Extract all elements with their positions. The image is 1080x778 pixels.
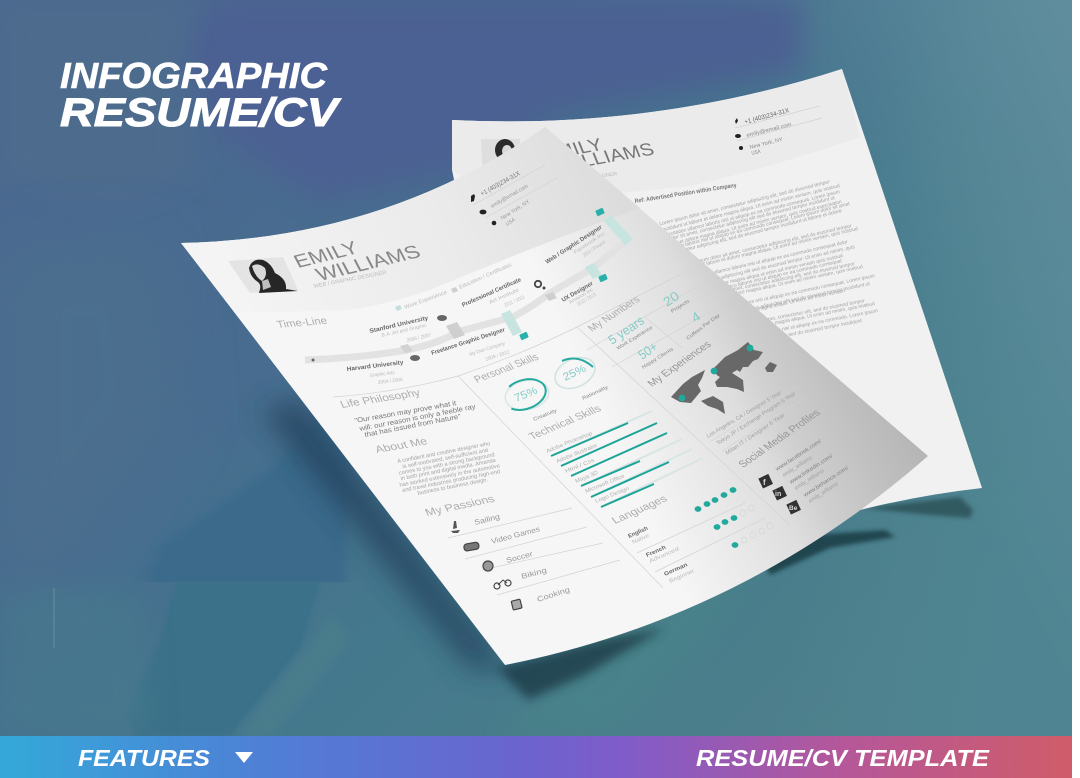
letter body text: consectetur adipiscing elit sed do eiusmod tempor incididunt (730, 318, 863, 349)
passion items: Soccer (505, 549, 534, 565)
back sheet header band (452, 69, 860, 205)
timeline entries: Harvard University (347, 360, 405, 373)
social icons: f (763, 478, 766, 487)
timeline entries: 2004 / 2006 (378, 377, 403, 386)
experience locations: Milan IT / Designer 6 Year (725, 412, 786, 457)
panel: my numbers: Happy Clients (641, 346, 675, 371)
panel: my numbers: Projects (670, 298, 691, 315)
title: INFOGRAPHIC (60, 55, 328, 96)
heading: my numbers: My Numbers (586, 294, 643, 334)
gauge: creativity 75%: Creativity (533, 408, 558, 423)
gauge: rationality 25%: 25% (561, 363, 588, 384)
language names: German (663, 562, 689, 578)
front sheet header band (181, 127, 640, 313)
social urls (774, 439, 850, 505)
timeline entries: Freelance Graphic Designer (431, 327, 506, 357)
about paragraph (397, 441, 501, 497)
gauge: creativity 75% (502, 376, 558, 423)
letter body text (659, 179, 878, 349)
contact details: New York, NY (500, 199, 531, 222)
back sheet name: EMILY (539, 135, 606, 164)
heading: my passions: My Passions (423, 494, 497, 519)
back sheet: cover letter (452, 69, 982, 510)
panel: personal skills (472, 351, 610, 423)
timeline entries: Art Institute (488, 287, 520, 306)
stats: 50+ (635, 339, 660, 362)
quote: will: our reason is only a feeble ray (358, 403, 477, 433)
social icons: Be (789, 505, 798, 512)
panel: languages (610, 487, 773, 585)
social urls: emily_williams (794, 468, 826, 492)
quote (354, 400, 477, 439)
name: WEB / GRAPHIC DESIGNER (313, 270, 387, 290)
timeline entries: 2011 / 2011 (503, 294, 526, 309)
panel: technical skills (527, 403, 703, 507)
timeline entries: B.A. Art and Graphic (381, 323, 428, 339)
heading: social media profiles: Social Media Profiles (736, 408, 823, 470)
letter body text: exercitation ullamco laboris nisi ut aliquip ex ea commodo consequat. Lorem ipsum (694, 273, 875, 317)
name: EMILY (290, 238, 362, 272)
social icons (758, 474, 801, 515)
portrait photo (228, 257, 298, 293)
timeline entries: 2013 / Present (582, 239, 607, 259)
stats: 20 (660, 288, 682, 309)
passion items: Biking (520, 566, 548, 581)
timeline entries: Stanford University (369, 315, 430, 335)
timeline entries: 2009 / 2012 (485, 349, 511, 363)
letter body text: labore et dolore magna aliqua. Ut enim ad minim veniam, quis nostrud exercitation (664, 199, 843, 249)
timeline entries: UX Designer (561, 281, 595, 304)
timeline entries: Graphic Arts (370, 370, 396, 379)
contact details (471, 165, 557, 228)
skill labels (546, 431, 630, 505)
stats: 4 (688, 309, 703, 325)
heading: about me: About Me (373, 436, 429, 456)
skill bars (551, 411, 703, 507)
letter body text: consectetur adipiscing elit, sed do eiusmod tempor incididunt ut labore et dolore (670, 208, 843, 257)
name: WILLIAMS (312, 242, 424, 285)
letter body text: consectetur adipiscing elit sed do eiusmod tempor. Ut enim ad minim, quis (694, 244, 856, 287)
panel: my numbers (586, 285, 722, 371)
back sheet name: WILLIAMS (554, 140, 657, 175)
about paragraph: A confident and creative designer who (397, 441, 491, 465)
language names: Advanced (648, 546, 680, 565)
gauge: rationality 25%: Rationality (581, 384, 610, 402)
passion items: Sailing (473, 512, 501, 527)
skill labels: Adobe Illustrator (556, 443, 599, 465)
back sheet name (539, 135, 657, 181)
heading: technical skills: Technical Skills (527, 403, 604, 442)
about paragraph: comes to you with a strong background (398, 452, 495, 477)
title: RESUME/CV (60, 91, 342, 135)
letter body text: exercitation ullamco laboris nisi ut aliquip ex ea commodo. Lorem ipsum (721, 308, 878, 344)
name (290, 238, 424, 290)
timeline entries: Web / Graphic Designer (545, 224, 604, 266)
passion items: Video Games (490, 524, 541, 546)
back sheet contact details: New York, NY (749, 137, 784, 151)
panel: my experiences (645, 339, 805, 457)
back sheet photo (481, 139, 520, 175)
front sheet: infographic resume (181, 127, 928, 665)
back sheet contact details: +1 (403)234-31X (744, 107, 791, 126)
gauge: creativity 75%: 75% (513, 385, 540, 405)
letter subject line: Ref: Advertised Position within Company (634, 183, 738, 205)
letter body text: Lorem ipsum dolor sit amet, consectetur adipiscing elit, sed do eiusmod tempor (683, 261, 856, 303)
legend: Education / Certificates (458, 262, 513, 291)
title (60, 55, 342, 135)
letter body text: ullamco laboris nisi ut aliquip ex ea commodo consequat. Lorem ipsum dolor sit amet (666, 201, 851, 252)
footer label: resume/cv template: RESUME/CV TEMPLATE (696, 745, 990, 771)
timeline icons (410, 208, 608, 361)
passion items (473, 512, 571, 604)
skill labels: Html / Css (565, 458, 596, 475)
timeline track (305, 215, 633, 362)
social icons: in (775, 491, 781, 498)
letter body text: Lorem ipsum dolor sit amet, consectetur elit, sed do eiusmod tempor (715, 298, 866, 333)
letter body text: exercitation ullamco laboris nisi ut aliquip ex ea commodo consequat. Lorem ipsum (661, 189, 840, 239)
gauge: rationality 25% (550, 351, 610, 402)
timeline entries: Facebook Inc (573, 231, 607, 256)
letter body text: incididunt ut labore et dolore magna aliqua. Ut enim ad minim, quis nostrud (711, 301, 876, 339)
proficiency dots (695, 487, 738, 548)
letter body text: Lorem ipsum dolor sit amet, consectetur adipiscing elit, sed do eiusmod tempor (659, 179, 831, 227)
stats (605, 288, 703, 362)
panel: life philosophy and about (339, 387, 501, 497)
letter body text: incididunt ut labore et dolore magna aliqua. Ut enim ad minim veniam, quis nostrud (661, 183, 841, 233)
letter body text: labore et dolore magna aliqua ut enim ad minim veniam quis nostrud (694, 253, 844, 293)
quote: that has issued from Nature" (364, 413, 462, 439)
about paragraph: business to business design. (417, 477, 489, 497)
back sheet contact details: USA (751, 149, 761, 157)
panel: social media profiles (736, 408, 850, 515)
social urls: www.facebook.com/ (774, 439, 823, 473)
legend: Work Experience (404, 290, 448, 311)
letter body text: Lorem ipsum dolor sit amet, consectetur adipiscing elit, sed do eiusmod tempor (680, 223, 853, 268)
language names: English (627, 526, 650, 540)
contact details: emily@email.com (490, 183, 530, 210)
letter body text: incididunt ut labore et dolore magna aliqua. Ut enim ad minim veniam, quis nostrud (678, 226, 859, 273)
social urls: emily_williams (782, 455, 814, 479)
icon: down triangle (235, 752, 253, 763)
back sheet contact details: emily@email.com (746, 122, 793, 139)
timeline entries: Professional Certificate (461, 277, 523, 309)
panel: my passions (423, 494, 620, 610)
social urls: www.linkedin.com/ (788, 453, 834, 486)
language names (627, 526, 696, 585)
letter body text: dolor sit amet, consectetur adipiscing elit sed do eiusmod tempor incididunt ut (701, 281, 871, 323)
back sheet name: DESIGNER (589, 171, 619, 181)
quote: "Our reason may prove what it (354, 400, 457, 425)
letter body text: labore et dolore magna aliqua. Ut enim ad minim veniam (722, 288, 845, 320)
about paragraph: and travel industries producing high-end (402, 469, 501, 494)
back sheet contact details (735, 106, 822, 157)
contact details: +1 (403)234-31X (480, 170, 522, 198)
timeline entries (347, 224, 607, 386)
contact details: USA (505, 217, 517, 228)
panel: my numbers: Coffees Per Day (686, 312, 722, 342)
letter body text: incididunt ut labore et dolore magna aliqua. Ut enim ad minim veniam, quis nostrud (683, 264, 864, 308)
timeline entries: 2012 / 2013 (576, 292, 597, 308)
heading: personal skills: Personal Skills (472, 352, 542, 385)
experience locations: Los Angeles, CA / Designer 5 Year (706, 390, 783, 440)
timeline heading: Time-Line (275, 315, 329, 331)
language names: Beginner (668, 568, 696, 585)
column dividers (333, 262, 790, 588)
language names: French (645, 545, 668, 559)
stats: 5 years (605, 312, 647, 347)
heading: life philosophy: Life Philosophy (339, 387, 423, 411)
experience locations: Tokyo JP / Exchange Program 6 Year (716, 391, 797, 447)
heading: languages: Languages (610, 493, 670, 526)
legend (395, 262, 513, 311)
world map (671, 342, 777, 414)
footer label: features: FEATURES (78, 745, 210, 771)
passion items: Cooking (536, 585, 571, 604)
skill labels: Maya 3D (575, 470, 599, 485)
social urls: emily_williams (808, 481, 840, 505)
passion icons (451, 521, 522, 610)
skill labels: Logo Design (595, 486, 630, 505)
skill labels: Adobe Photoshop (546, 431, 593, 455)
letter body text: dolor sit amet, consectetur adipiscing elit sed do eiusmod tempor incididunt ut (667, 195, 836, 242)
letter body text: ullamco laboris nisi ut aliquip ex ea commodo consequat (719, 258, 843, 292)
shadows beneath the sheets (262, 400, 973, 700)
timeline entries: 2006 / 2007 (406, 332, 432, 344)
social urls: www.behance.com/ (802, 465, 850, 499)
skill labels: Microsoft Office (585, 474, 626, 495)
language names: Native (631, 533, 650, 546)
about paragraph: in both print and digital media. Amanda (400, 458, 497, 482)
panel: my numbers: Work Experience (616, 325, 654, 352)
timeline entries: My Own Company (469, 341, 506, 358)
about paragraph: has worked extensively in the automotive (399, 463, 500, 489)
heading: my experiences: My Experiences (645, 339, 714, 389)
timeline entries: Amazon Inc (568, 287, 595, 306)
letter body text: exercitation ullamco laboris nisi ut aliquip ex ea commodo consequat dolor (687, 239, 849, 282)
footer bar (0, 736, 1072, 778)
about paragraph: is self-motivated, self-sufficient and (402, 448, 489, 470)
